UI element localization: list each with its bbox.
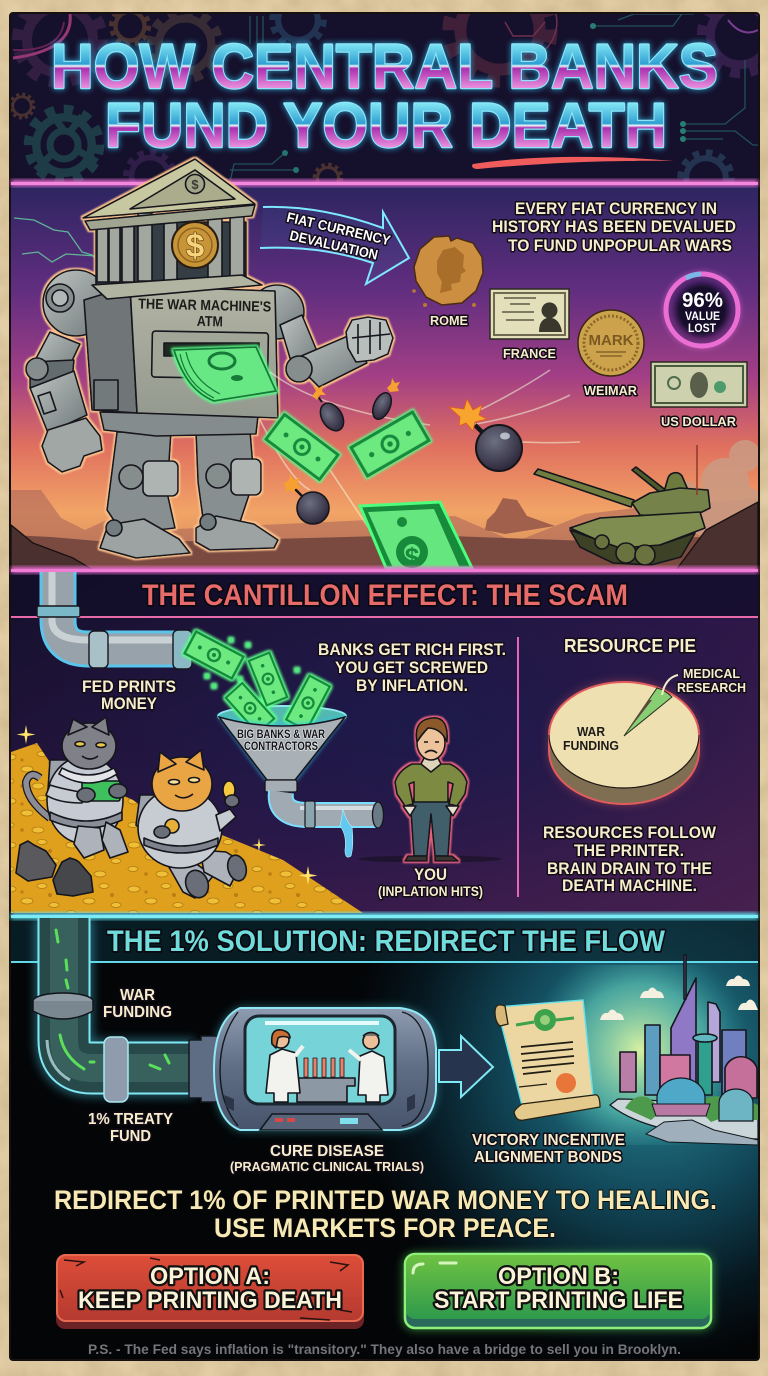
pie labels: MEDICAL <box>683 666 740 681</box>
icon: orange astronaut cat <box>136 750 249 901</box>
robot chest label: THE WAR MACHINE'S <box>138 297 272 316</box>
funnel label: BIG BANKS & WAR <box>237 727 325 741</box>
icon: water drip <box>340 808 353 857</box>
arrow: to victory bonds <box>439 1036 493 1097</box>
label: victory bonds: VICTORY INCENTIVE <box>472 1132 625 1149</box>
label: you <box>378 865 483 899</box>
right arm <box>250 285 393 387</box>
label: resources follow: RESOURCES FOLLOW <box>543 823 717 842</box>
cash slot <box>152 331 268 379</box>
panel: war machine <box>11 159 766 572</box>
arrow: fiat currency devaluation <box>260 207 409 284</box>
scientist: woman <box>266 1030 303 1102</box>
icon: value lost donut: LOST <box>688 321 717 335</box>
robot chest label <box>138 297 272 332</box>
icon: weimar coin: MARK <box>588 332 634 349</box>
label: treaty fund: 1% TREATY <box>88 1111 173 1128</box>
neon lightning lines <box>14 218 102 263</box>
icon: us dollar note <box>651 362 747 407</box>
section heading: THE CANTILLON EFFECT: THE SCAM <box>142 579 628 612</box>
falling bills <box>183 630 331 735</box>
panel: cantillon effect <box>11 567 758 916</box>
funnel <box>217 715 347 792</box>
funnel back rim <box>218 706 346 726</box>
icon: weimar coin <box>578 310 644 376</box>
scientist: man <box>349 1032 388 1102</box>
label: resource pie: RESOURCE PIE <box>564 636 696 656</box>
title <box>51 32 718 161</box>
ruined landscape <box>11 440 766 570</box>
pie chart: resource pie <box>549 675 699 804</box>
panel: the 1 percent solution <box>11 913 758 1359</box>
pie labels: RESEARCH <box>677 680 746 695</box>
icon: value lost donut <box>666 274 738 346</box>
capsule lab <box>189 1008 436 1130</box>
icon: france banknote <box>490 289 569 339</box>
futuristic city <box>540 955 758 1145</box>
robot chest label: ATM <box>197 314 223 330</box>
label: resources follow: THE PRINTER. <box>574 841 684 860</box>
smoke cloud <box>685 440 758 536</box>
label: cure disease <box>230 1143 424 1174</box>
label: banks text <box>318 640 506 695</box>
icon: gold dollar coin: $ <box>186 227 204 264</box>
label: victory bonds <box>472 1132 625 1166</box>
gold coin pile <box>11 725 363 913</box>
red underline brush stroke <box>472 157 674 169</box>
dollar sign on roof: $ <box>191 177 199 192</box>
title: FUND YOUR DEATH <box>105 91 667 161</box>
flying money <box>260 370 580 572</box>
body <box>84 286 278 436</box>
icon: rome coin <box>412 236 483 307</box>
lab table and test tubes <box>289 1058 355 1102</box>
label: you: YOU <box>414 865 447 884</box>
flying money: $ <box>405 542 420 572</box>
left arm <box>26 270 109 472</box>
label: treaty fund: FUND <box>110 1128 151 1145</box>
label: war funding: FUNDING <box>103 1004 172 1021</box>
button: option a: OPTION A: <box>150 1263 270 1290</box>
text: fiat history: HISTORY HAS BEEN DEVALUED <box>492 217 736 236</box>
pie labels: WAR <box>577 724 606 739</box>
cash stack <box>174 347 276 401</box>
label: weimar: WEIMAR <box>584 383 638 398</box>
label: banks text: BANKS GET RICH FIRST. <box>318 640 506 659</box>
button: option a <box>56 1254 364 1329</box>
label: fed prints money <box>82 677 176 713</box>
icon: value lost donut: VALUE <box>685 309 720 323</box>
legs and feet <box>100 430 278 558</box>
text: fiat history: EVERY FIAT CURRENCY IN <box>515 199 717 218</box>
icon: tank <box>534 445 710 565</box>
icon: gold dollar coin <box>172 222 218 268</box>
funnel label <box>237 727 325 753</box>
label: resources follow <box>543 823 717 895</box>
icon: robot bank war machine <box>26 159 393 558</box>
label: resources follow: DEATH MACHINE. <box>562 876 697 895</box>
bank roof and columns <box>83 159 262 299</box>
label: cure disease: (PRAGMATIC CLINICAL TRIALS) <box>230 1159 424 1174</box>
label: war funding: WAR <box>120 987 155 1004</box>
pipe: fed printing <box>37 572 192 669</box>
call to action text: USE MARKETS FOR PEACE. <box>214 1213 556 1243</box>
button: option a: KEEP PRINTING DEATH <box>78 1287 342 1314</box>
pipe: glass flow <box>33 918 195 1102</box>
label: rome: ROME <box>430 313 468 328</box>
icon: value lost donut: 96% <box>682 289 723 312</box>
arrow: fiat currency devaluation: DEVALUATION <box>288 227 380 263</box>
title: HOW CENTRAL BANKS <box>51 32 718 102</box>
call to action text <box>54 1185 717 1243</box>
label: banks text: YOU GET SCREWED <box>335 658 488 677</box>
label: fed prints money: MONEY <box>101 694 158 713</box>
button: option b: OPTION B: <box>498 1263 619 1290</box>
label: banks text: BY INFLATION. <box>356 676 468 695</box>
label: victory bonds: ALIGNMENT BONDS <box>474 1149 622 1166</box>
label: resources follow: BRAIN DRAIN TO THE <box>547 859 712 878</box>
arrow: fiat currency devaluation: FIAT CURRENCY <box>285 209 393 248</box>
postscript: P.S. - The Fed says inflation is "transitory." They also have a bridge to sell you in Brooklyn. <box>88 1341 681 1357</box>
title: FUND YOUR DEATH <box>105 91 667 161</box>
label: france: FRANCE <box>503 346 556 361</box>
label: cure disease: CURE DISEASE <box>270 1143 384 1160</box>
title: HOW CENTRAL BANKS <box>51 32 718 102</box>
icon: sad person with empty pockets <box>358 718 502 862</box>
icon: bond scroll <box>495 1000 600 1120</box>
pie labels: FUNDING <box>563 738 619 753</box>
pipe: funnel outlet <box>281 792 384 828</box>
text: fiat history: TO FUND UNPOPULAR WARS <box>508 236 732 255</box>
funnel label: CONTRACTORS <box>244 739 318 753</box>
icon: trash bags <box>16 841 93 896</box>
label: war funding <box>103 987 172 1021</box>
section heading: THE 1% SOLUTION: REDIRECT THE FLOW <box>107 925 666 958</box>
label: us dollar: US DOLLAR <box>661 414 737 429</box>
vertical divider <box>517 637 519 897</box>
label: treaty fund <box>88 1111 173 1145</box>
falling bombs <box>283 378 522 524</box>
button: option b <box>404 1254 712 1329</box>
icon: grey astronaut cat <box>26 717 128 858</box>
header background gears and circuits <box>11 14 758 182</box>
button: option b: START PRINTING LIFE <box>434 1287 683 1314</box>
pie labels <box>563 666 746 753</box>
call to action text: REDIRECT 1% OF PRINTED WAR MONEY TO HEALING. <box>54 1185 717 1215</box>
label: fed prints money: FED PRINTS <box>82 677 176 696</box>
label: you: (INPLATION HITS) <box>378 883 483 899</box>
text: fiat history <box>492 199 736 255</box>
